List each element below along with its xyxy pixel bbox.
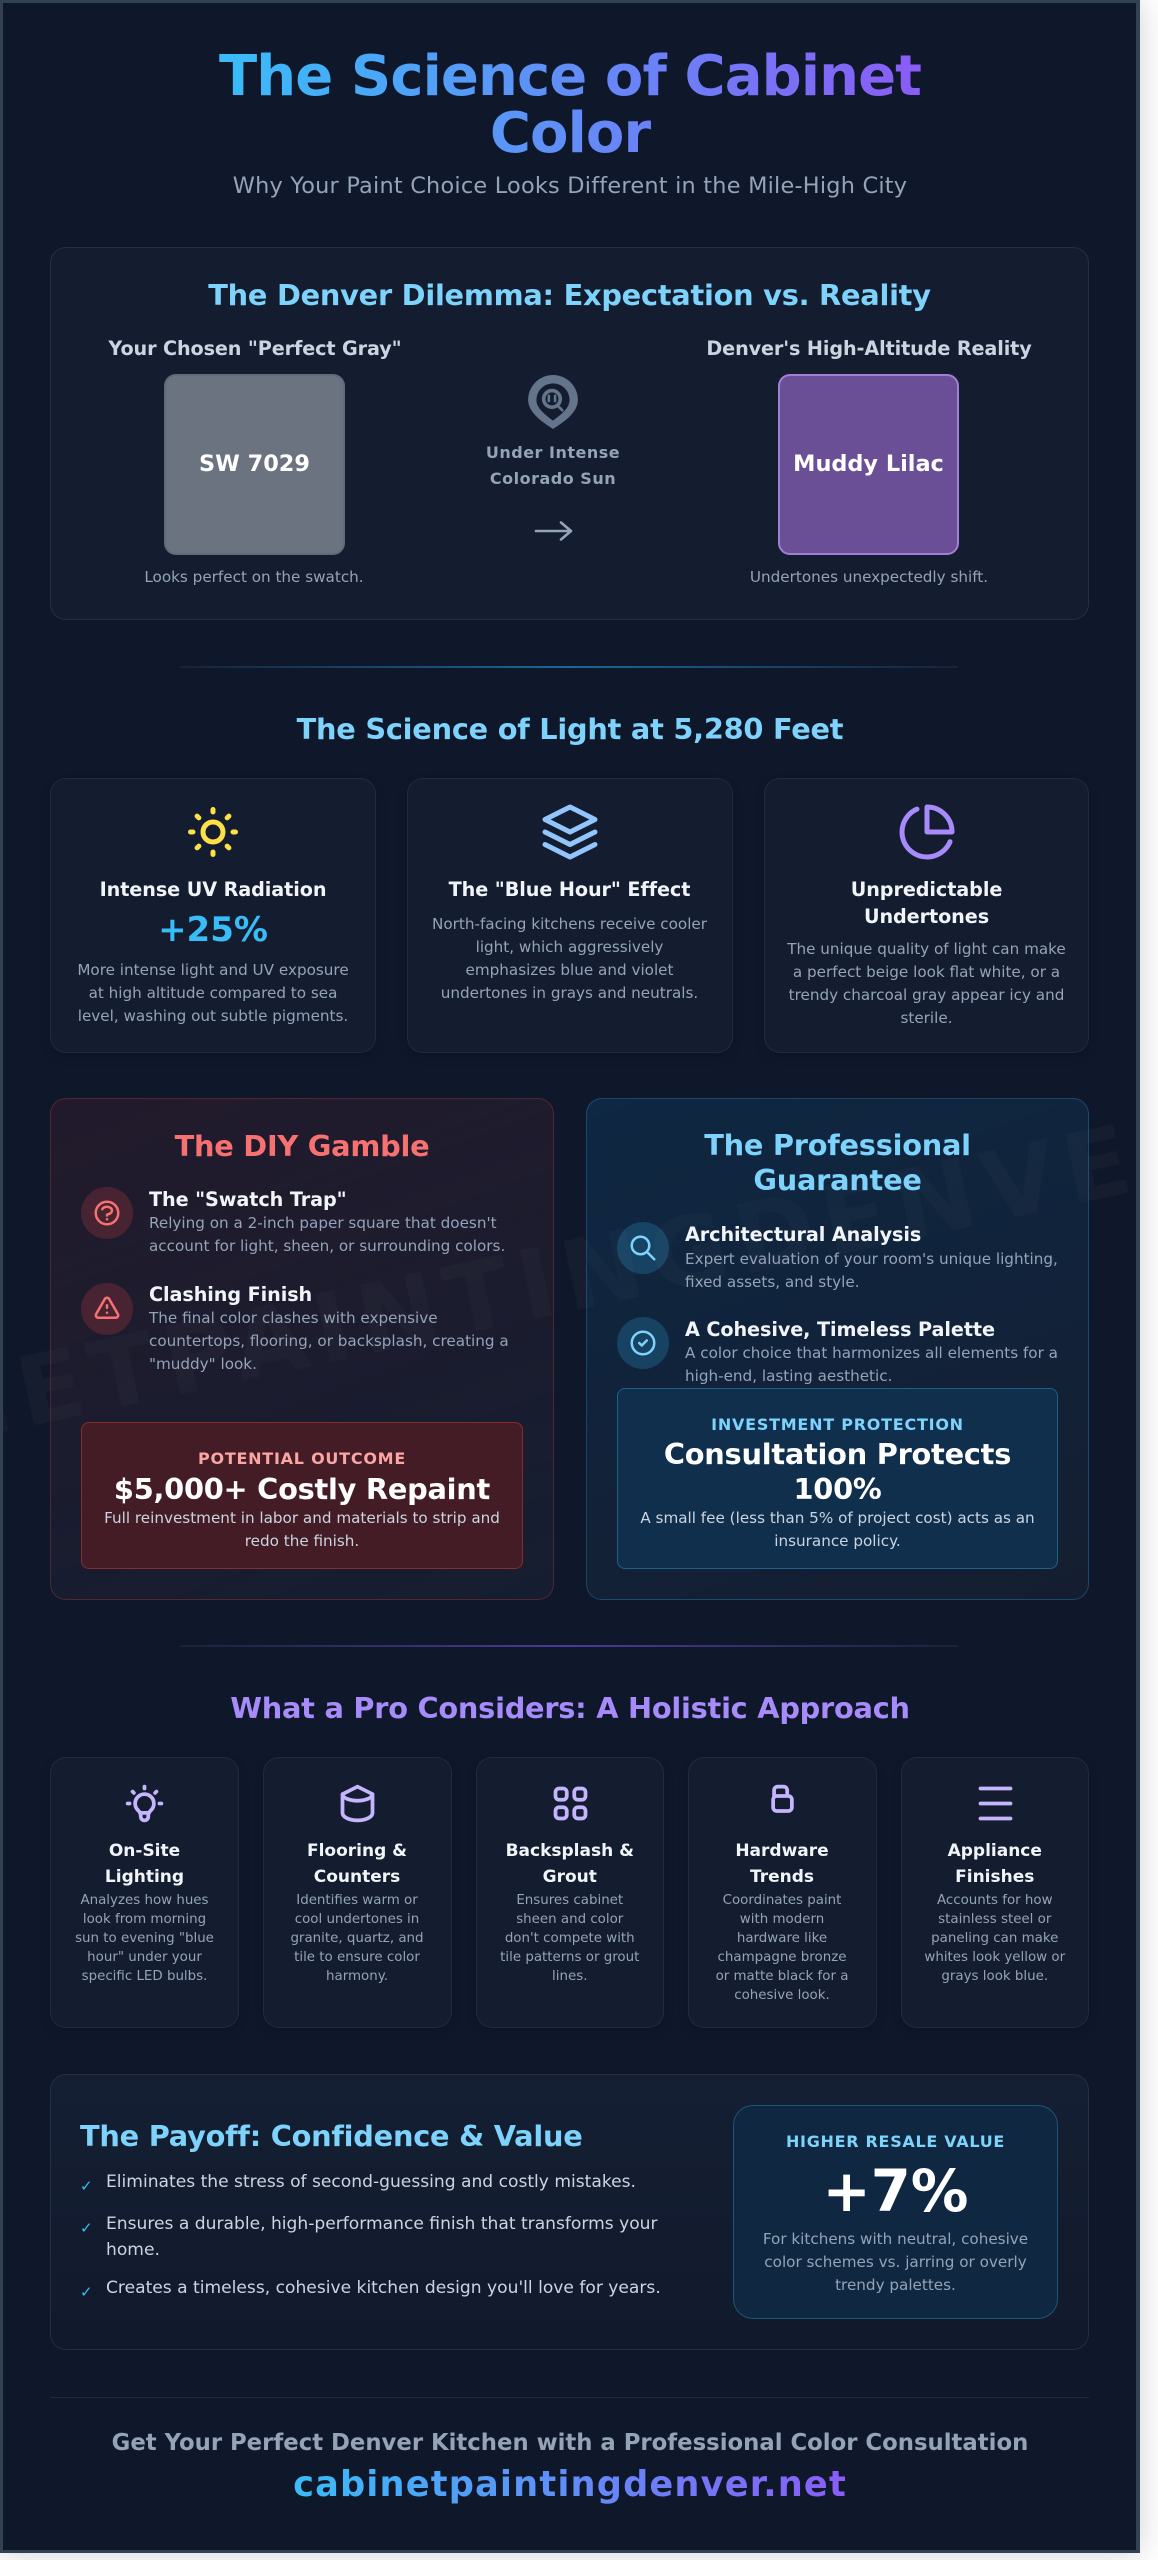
- card text: at high altitude compared to sea: [89, 984, 337, 1002]
- text: redo the finish.: [245, 1532, 359, 1550]
- list item 2: [80, 2214, 658, 2260]
- value: $5,000+ Costly Repaint: [114, 1472, 490, 1506]
- card title: Undertones: [864, 905, 989, 928]
- card text: harmony.: [326, 1969, 388, 1984]
- card text: champagne bronze: [718, 1950, 846, 1965]
- caption: lilac swatch: Undertones unexpectedly shift.: [750, 568, 988, 586]
- item: clashing finish: [81, 1283, 509, 1373]
- heading: Guarantee: [753, 1163, 922, 1197]
- icon: pie chart: [900, 804, 954, 860]
- stat box: resale value: [733, 2105, 1058, 2319]
- card title: [506, 1841, 634, 1887]
- text: For kitchens with neutral, cohesive: [763, 2230, 1028, 2248]
- card: hardware: [688, 1757, 876, 2028]
- divider: [180, 666, 958, 668]
- icon: sun location pin: [528, 375, 578, 429]
- heading: The Payoff: Confidence & Value: [80, 2119, 583, 2153]
- arrow: [534, 521, 572, 541]
- card text: [75, 1893, 214, 1984]
- card: backsplash: [476, 1757, 664, 2028]
- label: INVESTMENT PROTECTION: [711, 1415, 964, 1434]
- icon: cylinder: [340, 1784, 374, 1822]
- item text: [685, 1250, 1058, 1290]
- card title: [105, 1841, 184, 1887]
- card title: Flooring &: [307, 1841, 407, 1861]
- text: Full reinvestment in labor and materials to strip and: [104, 1509, 500, 1527]
- card text: stainless steel or: [938, 1912, 1051, 1927]
- list item 3: ✓: [80, 2283, 93, 2301]
- label: under intense sun: [486, 443, 620, 488]
- list item 3: Creates a timeless, cohesive kitchen design you'll love for years.: [106, 2278, 661, 2298]
- item text: high-end, lasting aesthetic.: [685, 1367, 892, 1385]
- icon: layers: [542, 804, 598, 860]
- card title: [307, 1841, 407, 1887]
- card title: Lighting: [105, 1867, 184, 1887]
- heading: science of light: The Science of Light at 5,280 Feet: [297, 712, 843, 746]
- card text: lines.: [552, 1969, 587, 1984]
- item text: Expert evaluation of your room's unique lighting,: [685, 1250, 1058, 1268]
- icon: bulb: [126, 1784, 164, 1822]
- title: [219, 44, 921, 166]
- card text: [500, 1893, 640, 1984]
- icon: warning: [81, 1283, 133, 1335]
- card: lighting: [50, 1757, 239, 2028]
- text: color schemes vs. jarring or overly: [764, 2253, 1027, 2271]
- text: [640, 1509, 1035, 1550]
- card text: whites look yellow or: [924, 1950, 1065, 1965]
- divider: [180, 1645, 958, 1647]
- item text: Relying on a 2-inch paper square that doesn't: [149, 1214, 497, 1232]
- value: Consultation Protects: [664, 1437, 1011, 1471]
- card text: sterile.: [900, 1009, 953, 1027]
- card title: The "Blue Hour" Effect: [449, 878, 690, 901]
- card: appliance: [900, 1757, 1089, 2028]
- item: swatch trap: [81, 1187, 505, 1255]
- list item 2: Ensures a durable, high-performance finish that transforms your: [106, 2214, 658, 2234]
- value: [664, 1437, 1011, 1506]
- card text: look from morning: [83, 1912, 206, 1927]
- list item 1: ✓: [80, 2177, 93, 2195]
- card text: [716, 1893, 848, 2003]
- swatch: gray: SW 7029: [199, 450, 310, 476]
- card text: grays look blue.: [941, 1969, 1048, 1984]
- card text: cohesive look.: [734, 1988, 830, 2003]
- card title: [735, 1841, 829, 1887]
- card title: Grout: [543, 1867, 597, 1887]
- card text: The unique quality of light can make: [787, 940, 1066, 958]
- panel: Denver dilemma: [50, 247, 1089, 620]
- item text: The final color clashes with expensive: [149, 1309, 438, 1327]
- icon: grid: [554, 1786, 588, 1820]
- card title: [851, 878, 1002, 928]
- card text: cool undertones in: [295, 1912, 419, 1927]
- list item 2: home.: [106, 2240, 160, 2260]
- card text: [77, 960, 349, 1024]
- card text: Analyzes how hues: [80, 1893, 209, 1908]
- title: The Science of Cabinet: [219, 44, 921, 109]
- card text: Accounts for how: [937, 1893, 1053, 1908]
- card title: Counters: [314, 1867, 400, 1887]
- item text: [149, 1214, 505, 1255]
- card: UV radiation: [50, 778, 376, 1053]
- label: perfect gray: Your Chosen "Perfect Gray": [108, 337, 402, 360]
- icon: question: [81, 1187, 133, 1239]
- label: altitude reality: Denver's High-Altitude Reality: [706, 337, 1032, 360]
- panel: DIY gamble: [50, 1098, 554, 1600]
- card text: trendy charcoal gray appear icy and: [789, 986, 1064, 1004]
- card title: On-Site: [109, 1841, 180, 1861]
- card: blue hour: [406, 778, 732, 1053]
- subtitle: Why Your Paint Choice Looks Different in the Mile-High City: [233, 173, 907, 199]
- item: cohesive palette: [617, 1317, 1058, 1385]
- label: under intense sun: Colorado Sun: [490, 469, 616, 488]
- item text: "muddy" look.: [149, 1355, 257, 1373]
- callout: investment protection: [617, 1388, 1058, 1569]
- stat: +25%: +25%: [158, 910, 268, 950]
- card text: tile to ensure color: [294, 1950, 420, 1965]
- value: 100%: [794, 1472, 881, 1506]
- heading: [704, 1128, 971, 1197]
- text: A small fee (less than 5% of project cost) acts as an: [640, 1509, 1035, 1527]
- heading: holistic approach: What a Pro Considers: A Holistic Approach: [230, 1691, 910, 1725]
- card text: Identifies warm or: [296, 1893, 418, 1908]
- card text: [924, 1893, 1066, 1984]
- list item 2: ✓: [80, 2219, 93, 2237]
- card text: a perfect beige look flat white, or a: [793, 963, 1060, 981]
- card title: Finishes: [955, 1867, 1034, 1887]
- item title: Architectural Analysis: [685, 1223, 921, 1246]
- item title: Clashing Finish: [149, 1283, 312, 1306]
- heading: The DIY Gamble: [175, 1129, 429, 1163]
- card text: undertones in grays and neutrals.: [441, 984, 698, 1002]
- label: under intense sun: Under Intense: [486, 443, 620, 462]
- item text: [148, 1309, 509, 1373]
- card text: or matte black for a: [716, 1969, 848, 1984]
- card text: sheen and color: [516, 1912, 623, 1927]
- swatch: muddy lilac: [778, 374, 959, 555]
- card text: Ensures cabinet: [516, 1893, 623, 1908]
- icon: search: [617, 1222, 669, 1274]
- card title: Backsplash &: [506, 1841, 634, 1861]
- card text: tile patterns or grout: [500, 1950, 639, 1965]
- item text: [685, 1344, 1058, 1385]
- card text: [787, 940, 1066, 1027]
- icon: lines: [978, 1786, 1012, 1820]
- item text: countertops, flooring, or backsplash, creating a: [149, 1332, 509, 1350]
- card text: don't compete with: [505, 1931, 635, 1946]
- label: HIGHER RESALE VALUE: [786, 2132, 1005, 2151]
- card text: [432, 914, 707, 1002]
- title: Color: [490, 101, 650, 166]
- card title: Hardware: [735, 1841, 829, 1861]
- footer: call to action: Get Your Perfect Denver Kitchen with a Professional Color Consultation: [112, 2430, 1028, 2456]
- card text: paneling can make: [931, 1931, 1058, 1946]
- text: [104, 1509, 500, 1550]
- text: trendy palettes.: [835, 2276, 956, 2294]
- item title: A Cohesive, Timeless Palette: [685, 1318, 995, 1340]
- label: POTENTIAL OUTCOME: [198, 1449, 406, 1468]
- card text: sun to evening "blue: [75, 1931, 214, 1946]
- card title: Appliance: [948, 1841, 1042, 1861]
- card text: [290, 1893, 424, 1984]
- stat: +7%: [822, 2158, 969, 2225]
- card text: specific LED bulbs.: [82, 1969, 207, 1984]
- heading: The Professional: [704, 1128, 971, 1162]
- card text: level, washing out subtle pigments.: [78, 1006, 348, 1024]
- card text: North-facing kitchens receive cooler: [432, 914, 707, 932]
- card text: hour" under your: [87, 1950, 202, 1965]
- card text: granite, quartz, and: [290, 1931, 424, 1946]
- card title: Unpredictable: [851, 878, 1002, 901]
- card text: light, which aggressively: [476, 938, 663, 956]
- panel: professional guarantee: [586, 1098, 1089, 1600]
- item text: account for light, sheen, or surrounding colors.: [149, 1237, 505, 1255]
- card title: Trends: [750, 1867, 814, 1887]
- icon: sun: [188, 807, 238, 857]
- text: insurance policy.: [774, 1532, 901, 1550]
- text: [734, 2228, 1057, 2297]
- card text: emphasizes blue and violet: [466, 960, 673, 978]
- card text: hardware like: [737, 1931, 827, 1946]
- card: flooring: [262, 1757, 452, 2028]
- item title: The "Swatch Trap": [149, 1188, 347, 1211]
- item: architectural analysis: [617, 1222, 1058, 1290]
- footer: url: cabinetpaintingdenver.net: [293, 2464, 847, 2505]
- caption: gray swatch: Looks perfect on the swatch.: [144, 568, 364, 586]
- panel: payoff: [50, 2074, 1089, 2350]
- icon: check: [617, 1316, 669, 1368]
- item text: A color choice that harmonizes all elements for a: [685, 1344, 1058, 1362]
- card: undertones: [764, 778, 1089, 1053]
- heading: dilemma: The Denver Dilemma: Expectation vs. Reality: [208, 278, 931, 312]
- callout: potential outcome: [81, 1422, 523, 1569]
- card text: More intense light and UV exposure: [77, 960, 349, 978]
- list item 1: Eliminates the stress of second-guessing and costly mistakes.: [106, 2172, 636, 2192]
- swatch: muddy lilac: Muddy Lilac: [793, 450, 944, 476]
- card text: with modern: [740, 1912, 824, 1927]
- footer divider: [50, 2397, 1089, 2398]
- swatch: gray: [164, 374, 345, 555]
- card text: Coordinates paint: [723, 1893, 841, 1908]
- item text: fixed assets, and style.: [685, 1272, 860, 1290]
- card title: Intense UV Radiation: [100, 878, 326, 901]
- card title: [948, 1841, 1042, 1887]
- icon: hardware: [771, 1784, 794, 1813]
